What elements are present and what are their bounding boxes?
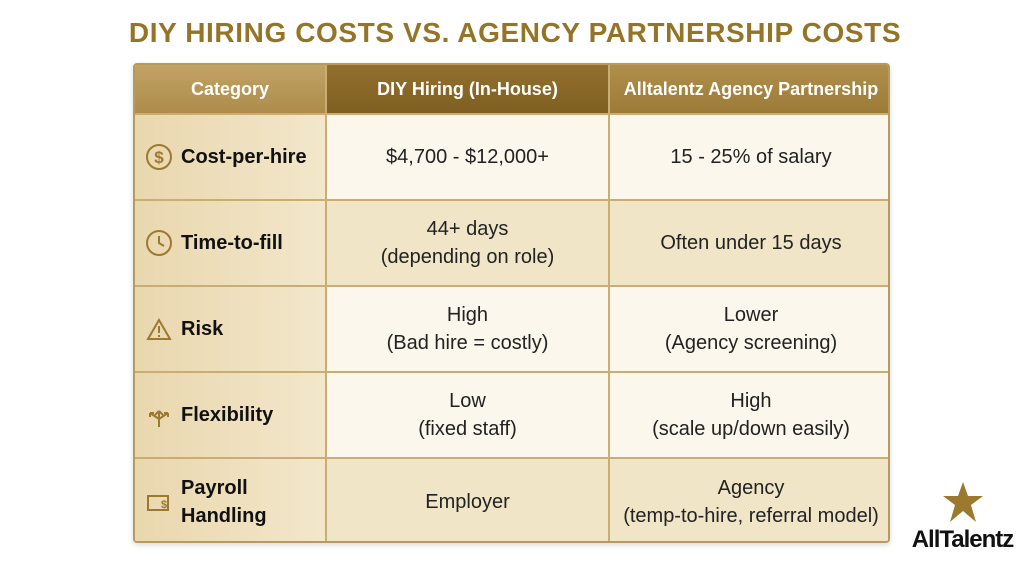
row: flexibility: High xyxy=(730,390,772,412)
row: payroll handling xyxy=(135,459,888,541)
row: payroll handling: (temp-to-hire, referral model) xyxy=(623,505,879,527)
icon: star xyxy=(943,482,983,522)
row: flexibility: Low xyxy=(449,390,486,412)
row: time-to-fill: (depending on role) xyxy=(381,246,554,268)
row: time-to-fill: Often under 15 days xyxy=(660,232,842,254)
header row xyxy=(135,65,892,115)
row: flexibility xyxy=(135,373,892,459)
header row: Alltalentz Agency Partnership xyxy=(624,79,878,99)
row: flexibility: (fixed staff) xyxy=(418,418,517,440)
row: flexibility: Flexibility xyxy=(181,404,273,426)
header row: DIY Hiring (In-House) xyxy=(377,79,558,99)
row: risk: High xyxy=(447,304,488,326)
row: cost-per-hire xyxy=(135,115,892,201)
header row: Category xyxy=(191,79,269,99)
title: DIY HIRING COSTS VS. AGENCY PARTNERSHIP COSTS xyxy=(129,17,901,48)
row: risk: (Bad hire = costly) xyxy=(387,332,548,354)
row: payroll handling: Handling xyxy=(181,505,267,527)
row: cost-per-hire: 15 - 25% of salary xyxy=(670,146,832,168)
comparison table xyxy=(133,63,890,543)
row: risk: (Agency screening) xyxy=(665,332,837,354)
logo: AllTalentz xyxy=(912,526,1013,553)
row: cost-per-hire: $ xyxy=(154,148,164,167)
row: time-to-fill xyxy=(135,201,892,287)
row: flexibility: (scale up/down easily) xyxy=(652,418,850,440)
row: time-to-fill: Time-to-fill xyxy=(181,232,283,254)
row: time-to-fill: 44+ days xyxy=(427,218,508,240)
row: cost-per-hire: $4,700 - $12,000+ xyxy=(386,146,549,168)
row: cost-per-hire: Cost-per-hire xyxy=(181,146,307,168)
row: payroll handling: $ xyxy=(161,499,167,511)
row: payroll handling: Payroll xyxy=(181,477,248,499)
row: risk: Lower xyxy=(724,304,778,326)
row: risk: Risk xyxy=(181,318,223,340)
row: risk xyxy=(135,287,892,373)
row: payroll handling: Employer xyxy=(425,491,510,513)
row: payroll handling: Agency xyxy=(718,477,784,499)
logo xyxy=(912,482,1014,553)
